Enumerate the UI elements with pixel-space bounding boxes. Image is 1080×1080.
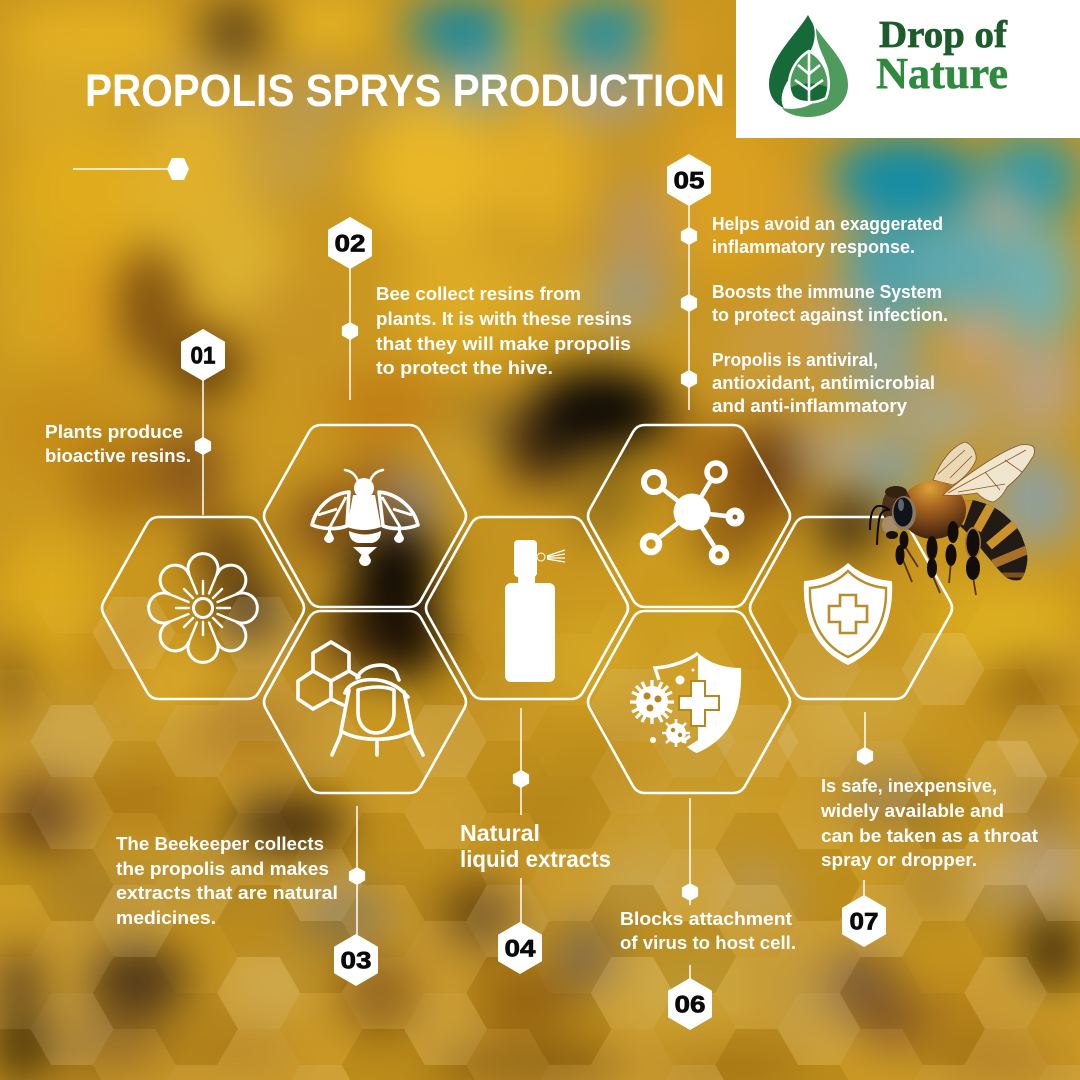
callout 4: connector, number and text: 04 (504, 936, 536, 962)
callout 2: connector, number and text: Bee collect resins from (376, 283, 581, 304)
bee illustration (870, 442, 1035, 595)
callout 7: connector, number and text: spray or dropper. (821, 849, 977, 870)
callout 5: connector, number and text: 05 (674, 168, 704, 194)
logo panel (736, 0, 1080, 138)
hexagon panel 3: beekeeper (264, 611, 466, 793)
callout 4: connector, number and text: liquid extracts (460, 846, 611, 872)
hexagon panel 7: shield with cross (750, 517, 952, 699)
callout 5: connector, number and text: inflammatory response. (712, 236, 915, 257)
callout 7: connector, number and text: widely available and (820, 800, 1004, 821)
callout 5: connector, number and text (668, 154, 948, 416)
hexagon panel 4: spray bottle (426, 517, 628, 699)
callout 7: connector, number and text: 07 (850, 908, 878, 936)
callout 3: connector, number and text (116, 806, 378, 986)
callout 3: connector, number and text: extracts that are natural (116, 882, 338, 903)
callout 6: connector, number and text: Blocks attachment (620, 908, 792, 929)
bee thorax (900, 481, 966, 539)
logo wordmark (876, 14, 1008, 98)
callout 1: connector, number and text: bioactive resins. (45, 445, 191, 466)
callout 5: connector, number and text: Helps avoid an exaggerated (712, 213, 943, 234)
callout 2: connector, number and text: plants. It is with these resins (376, 308, 632, 329)
icon: green drop with leaf (769, 15, 848, 117)
background: honeycomb overlay (0, 597, 1080, 1080)
logo wordmark: Nature (876, 49, 1008, 98)
bee head (870, 486, 916, 545)
callout 3: connector, number and text: medicines. (116, 907, 216, 928)
callout 4: connector, number and text (460, 708, 611, 974)
title: PROPOLIS SPRYS PRODUCTION (85, 65, 725, 116)
callout 1: connector, number and text: 01 (190, 342, 216, 370)
logo wordmark: Drop of (879, 14, 1008, 56)
callout 5: connector, number and text: to protect against infection. (712, 304, 948, 325)
title accent: line with hexagon (73, 158, 189, 180)
callout 7: connector, number and text (820, 712, 1038, 946)
icon: molecule network (643, 463, 741, 562)
callout 6: connector, number and text (620, 798, 796, 1030)
callout 2: connector, number and text (328, 218, 632, 400)
bee rear wing (933, 442, 976, 485)
bee abdomen (960, 500, 1028, 580)
callout 2: connector, number and text: to protect the hive. (376, 357, 553, 378)
callout 7: connector, number and text: Is safe, inexpensive, (821, 775, 997, 796)
icon: beekeeper with honeycomb (298, 642, 423, 755)
callout 4: connector, number and text: Natural (460, 820, 540, 846)
icon: shield with virus (630, 653, 741, 753)
icon: spray bottle (505, 540, 565, 682)
callout 6: connector, number and text: 06 (674, 992, 706, 1018)
hexagon panel 1: flower (102, 517, 304, 699)
callout 1: connector, number and text (45, 330, 224, 515)
callout 5: connector, number and text: Propolis is antiviral, (712, 349, 878, 370)
callout 3: connector, number and text: 03 (340, 948, 372, 974)
bee legs (896, 521, 981, 595)
hexagon panel 6: shield blocking virus (588, 611, 790, 793)
icon: flower (149, 554, 257, 662)
callout 3: connector, number and text: The Beekeeper collects (116, 833, 324, 854)
callout 1: connector, number and text: Plants produce (45, 421, 183, 442)
callout 5: connector, number and text: and anti-inflammatory (712, 395, 908, 416)
icon: bee with resin drops (312, 470, 418, 566)
hexagon panel 2: bee with drops (264, 425, 466, 607)
icon: medical shield (804, 563, 892, 665)
callout 7: connector, number and text: can be taken as a throat (821, 825, 1038, 846)
callout 5: connector, number and text: antioxidant, antimicrobial (712, 372, 935, 393)
callout 6: connector, number and text: of virus to host cell. (620, 932, 796, 953)
hexagon panel 5: molecule (588, 425, 790, 607)
callout 2: connector, number and text: 02 (334, 230, 366, 258)
bee front wing (943, 445, 1034, 502)
callout 2: connector, number and text: that they will make propolis (376, 333, 631, 354)
callout 5: connector, number and text: Boosts the immune System (712, 281, 942, 302)
callout 3: connector, number and text: the propolis and makes (116, 858, 329, 879)
